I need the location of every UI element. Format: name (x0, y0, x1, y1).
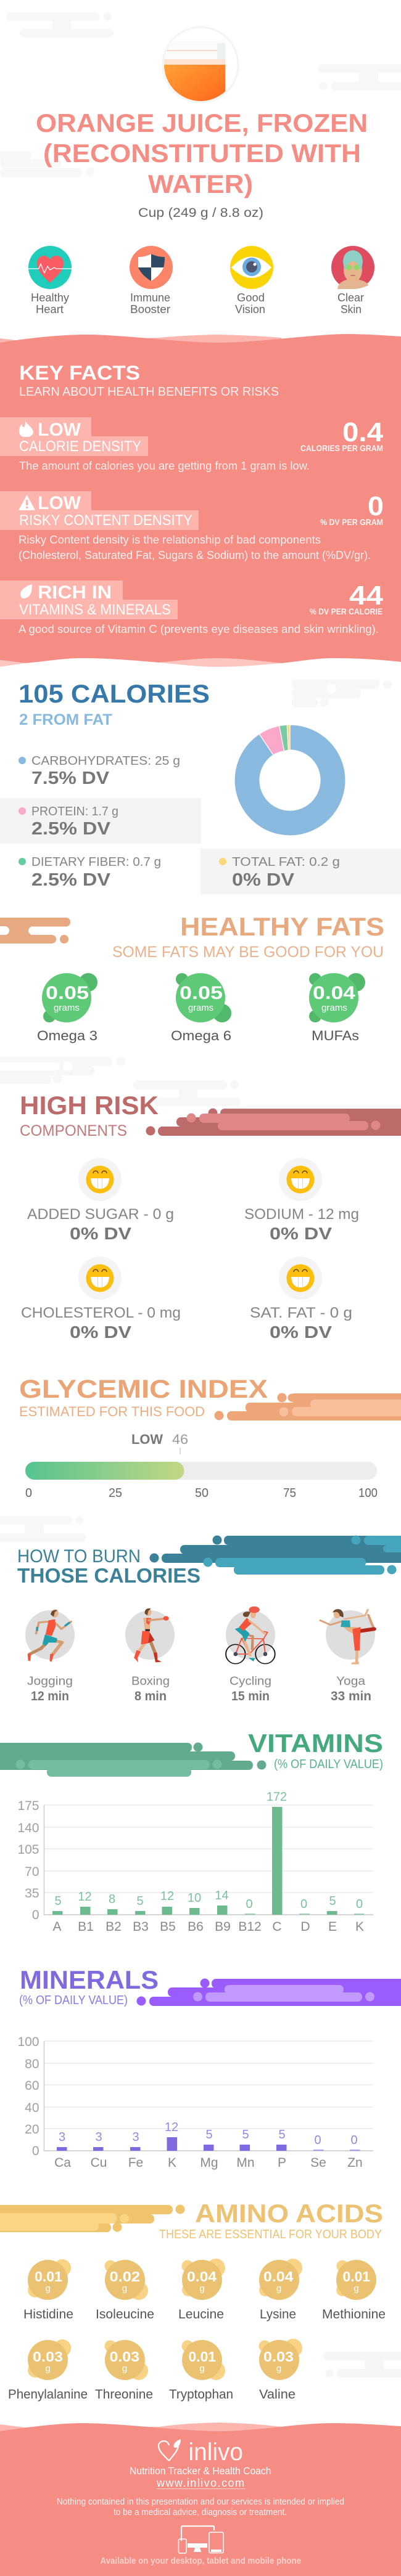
glycemic index gauge: 0 (25, 1486, 32, 1500)
background cloud: top left (6, 12, 114, 38)
glycemic index gauge (25, 1432, 378, 1500)
decorative band: vitamins (0, 1743, 267, 1777)
icon: warning triangle (19, 495, 35, 510)
legend: total fat: 0% DV (232, 870, 295, 890)
bar chart: vitamins: D (300, 1920, 310, 1934)
title (36, 108, 368, 198)
amino: isoleucine: Isoleucine (96, 2307, 154, 2321)
bar chart: minerals: 5 (242, 2128, 249, 2142)
fat: omega 3: Omega 3 (37, 1028, 97, 1043)
bar chart: minerals: 20 (25, 2122, 39, 2137)
bar chart: vitamins: 8 (109, 1893, 115, 1906)
fact: calorie density: 0.4 (342, 417, 384, 447)
fat: MUFAs: 0.04 (313, 983, 355, 1003)
amino: phenylalanine: g (45, 2363, 51, 2374)
fact: risky content density: Risky Content density is the relationship of bad components (19, 534, 321, 546)
background cloud: behind title (0, 151, 94, 177)
fat: omega 6: 0.05 (180, 983, 223, 1003)
glycemic index gauge: 25 (109, 1486, 122, 1500)
burn calories heading (17, 1546, 200, 1587)
risk: cholesterol: 0% DV (70, 1323, 131, 1342)
disclaimer (57, 2497, 344, 2517)
risk: sodium: SODIUM - 12 mg (244, 1206, 359, 1223)
fact: calorie density (0, 417, 384, 472)
amino acids heading (159, 2199, 383, 2241)
minerals heading: (% OF DAILY VALUE) (19, 1994, 128, 2007)
bar chart: vitamins: 0 (300, 1897, 307, 1911)
bar chart: vitamins: 5 (54, 1894, 62, 1908)
legend: carbohydrates: CARBOHYDRATES: 25 g (31, 754, 180, 768)
logo: inlivo (159, 2439, 243, 2466)
amino: threonine: 0.03 (110, 2349, 139, 2365)
fat: MUFAs: grams (321, 1003, 347, 1013)
fact: rich in vitamins and minerals: 44 (349, 581, 384, 611)
title: ORANGE JUICE, FROZEN (36, 108, 368, 137)
decorative band: healthy fats (0, 918, 70, 944)
background cloud: calories (292, 680, 392, 707)
glycemic index gauge: 46 (172, 1432, 188, 1447)
key facts heading: KEY FACTS (19, 362, 140, 384)
amino: isoleucine: g (122, 2283, 127, 2294)
glycemic index heading (19, 1374, 268, 1419)
calories heading (19, 679, 210, 728)
risk: cholesterol (21, 1257, 181, 1342)
bar chart: vitamins: B2 (105, 1920, 122, 1934)
bar chart: minerals: Mg (200, 2156, 218, 2170)
icon: desktop, tablet and phone (179, 2526, 223, 2553)
bar chart: vitamins: 105 (17, 1843, 39, 1857)
risk: sodium: 0% DV (270, 1224, 332, 1243)
benefit: clear skin: Clear (337, 291, 364, 304)
panel: key facts (0, 334, 401, 667)
bar chart: minerals: Zn (347, 2156, 363, 2170)
amino: tryptophan: 0.01 (189, 2349, 216, 2365)
bar chart: minerals: 0 (314, 2134, 321, 2147)
bar chart: vitamins: 0 (356, 1897, 363, 1911)
healthy fats heading: SOME FATS MAY BE GOOD FOR YOU (112, 944, 384, 961)
icon: flame (19, 420, 33, 437)
fat: omega 6 (171, 973, 231, 1043)
benefit: clear skin: Skin (341, 303, 362, 316)
bar chart: vitamins: 12 (160, 1889, 174, 1903)
amino: lysine: g (276, 2283, 281, 2294)
fact: risky content density (0, 491, 384, 561)
serving size: Cup (249 g / 8.8 oz) (138, 206, 263, 220)
amino: methionine: Methionine (322, 2307, 386, 2321)
benefit: clear skin (331, 246, 374, 316)
benefit: immune booster (130, 246, 173, 316)
fat: omega 3: 0.05 (46, 983, 89, 1003)
availability note: Available on your desktop, tablet and mobile phone (100, 2556, 301, 2566)
bar chart: minerals: K (168, 2156, 176, 2170)
background cloud: burn calories (0, 1516, 86, 1542)
amino: valine: Valine (259, 2387, 296, 2402)
legend: protein: 2.5% DV (31, 819, 111, 839)
amino: threonine: Threonine (95, 2387, 153, 2402)
benefit: healthy heart (28, 246, 72, 316)
benefit: immune booster: Immune (130, 291, 170, 304)
decorative band: minerals (137, 1978, 401, 2006)
legend: dietary fiber: 2.5% DV (31, 870, 111, 890)
bar chart: vitamins: 172 (267, 1790, 287, 1804)
bar chart: minerals: Cu (91, 2156, 107, 2170)
amino: valine: 0.03 (263, 2349, 294, 2365)
amino: histidine: g (45, 2283, 51, 2294)
amino: leucine: g (199, 2283, 205, 2294)
calories heading: 2 FROM FAT (19, 711, 112, 728)
risk: saturated fat: 0% DV (270, 1323, 332, 1342)
amino: leucine (178, 2259, 225, 2321)
risk: added sugar (27, 1158, 174, 1243)
key facts heading: LEARN ABOUT HEALTH BENEFITS OR RISKS (19, 385, 279, 399)
benefit: good vision: Good (237, 291, 265, 304)
amino: methionine (322, 2260, 386, 2321)
risk: cholesterol: CHOLESTEROL - 0 mg (21, 1305, 181, 1321)
activity: cycling (226, 1607, 275, 1703)
bar chart: vitamins: 35 (25, 1886, 39, 1901)
title: (RECONSTITUTED WITH (43, 139, 361, 168)
amino: valine: g (276, 2363, 281, 2374)
amino: isoleucine: 0.02 (110, 2268, 140, 2285)
benefit: immune booster: Booster (130, 303, 170, 316)
fact: calorie density: CALORIE DENSITY (19, 438, 141, 455)
title: WATER) (148, 169, 253, 198)
glycemic index gauge: 50 (195, 1486, 209, 1500)
activity: yoga: Yoga (336, 1675, 365, 1688)
amino: leucine: 0.04 (187, 2268, 217, 2285)
bar chart: minerals: 60 (25, 2079, 39, 2093)
amino: histidine: 0.01 (35, 2268, 62, 2285)
decorative band: amino acids (0, 2205, 185, 2232)
legend: total fat: TOTAL FAT: 0.2 g (232, 855, 340, 869)
risk: saturated fat: SAT. FAT - 0 g (250, 1305, 352, 1321)
activity: yoga: 33 min (331, 1689, 371, 1703)
key facts heading (19, 362, 279, 399)
fat: omega 6: grams (188, 1003, 213, 1013)
benefit: good vision: Vision (235, 303, 265, 316)
risk: sodium (244, 1158, 359, 1243)
amino acids heading: THESE ARE ESSENTIAL FOR YOUR BODY (159, 2228, 382, 2241)
decorative band: high risk (146, 1108, 401, 1136)
bar chart: vitamins: 175 (17, 1799, 39, 1813)
donut chart: macronutrients (234, 725, 345, 836)
glycemic index heading: ESTIMATED FOR THIS FOOD (19, 1404, 205, 1419)
healthy fats heading (112, 912, 384, 961)
activity: boxing: Boxing (131, 1675, 170, 1688)
disclaimer: Nothing contained in this presentation and our services is intended or implied (57, 2497, 344, 2507)
benefit: healthy heart: Healthy (31, 291, 69, 304)
amino: threonine (95, 2340, 153, 2402)
vitamins heading (248, 1729, 383, 1771)
tagline: Nutrition Tracker & Health Coach (130, 2465, 271, 2477)
fact: rich in vitamins and minerals: RICH IN (38, 582, 112, 603)
high risk heading (20, 1091, 159, 1139)
glycemic index gauge: 75 (283, 1486, 296, 1500)
decorative band: glycemic index (215, 1393, 401, 1420)
bar chart: vitamins (17, 1790, 373, 1934)
vitamins heading: (% OF DAILY VALUE) (274, 1758, 383, 1771)
fat: omega 3: grams (54, 1003, 80, 1013)
bar chart: vitamins: K (355, 1920, 364, 1934)
activity: yoga (320, 1609, 375, 1703)
bar chart: vitamins: 5 (136, 1894, 144, 1908)
bar chart: vitamins: C (272, 1920, 282, 1934)
bar chart: minerals: 3 (59, 2130, 65, 2144)
fact: risky content density: LOW (38, 493, 81, 513)
bar chart: vitamins: 14 (215, 1889, 229, 1902)
fact: risky content density: (Cholesterol, Saturated Fat, Sugars & Sodium) to the amount (%DV/gr). (19, 549, 371, 561)
bar chart: vitamins: B1 (78, 1920, 94, 1934)
high risk heading: HIGH RISK (20, 1091, 159, 1120)
glycemic index gauge: 100 (358, 1486, 378, 1500)
activity: cycling: Cycling (229, 1675, 271, 1688)
amino: valine (259, 2339, 302, 2402)
bar chart: vitamins: 0 (246, 1897, 253, 1911)
bar chart: vitamins: A (52, 1920, 62, 1934)
bar chart: vitamins: 10 (188, 1891, 201, 1905)
glycemic index gauge: LOW (131, 1432, 163, 1447)
legend: carbohydrates (19, 754, 180, 788)
bar chart: minerals: 100 (17, 2035, 39, 2049)
fact: calorie density: The amount of calories you are getting from 1 gram is low. (19, 460, 310, 472)
bar chart: minerals: 5 (205, 2128, 213, 2142)
bar chart: minerals: 5 (278, 2128, 286, 2142)
benefit: healthy heart: Heart (36, 303, 64, 316)
decorative band: burn calories (149, 1536, 401, 1575)
background cloud: left of high risk (0, 1057, 125, 1084)
fact: risky content density: % DV PER GRAM (320, 517, 383, 527)
background cloud: centre of high risk (133, 1080, 241, 1106)
healthy fats heading: HEALTHY FATS (180, 912, 384, 941)
burn calories heading: HOW TO BURN (17, 1546, 141, 1567)
amino: leucine: Leucine (178, 2307, 224, 2321)
amino: methionine: g (353, 2283, 359, 2294)
amino: lysine: Lysine (260, 2307, 296, 2321)
bar chart: vitamins: B5 (160, 1920, 176, 1934)
activity: boxing: 8 min (134, 1689, 167, 1703)
bar chart: vitamins: E (328, 1920, 337, 1934)
activity: cycling: 15 min (231, 1689, 270, 1703)
bar chart: minerals: Ca (54, 2156, 71, 2170)
icon: leaf (20, 584, 32, 598)
bar chart: vitamins: 12 (78, 1890, 92, 1904)
high risk heading: COMPONENTS (20, 1122, 127, 1139)
bar chart: minerals: 3 (95, 2130, 102, 2144)
minerals heading (19, 1965, 159, 2007)
bar chart: minerals: 12 (165, 2121, 178, 2134)
amino: tryptophan: Tryptophan (169, 2387, 233, 2402)
fact: rich in vitamins and minerals: % DV PER CALORIE (310, 606, 382, 616)
bar chart: vitamins: 140 (17, 1821, 39, 1835)
fact: calorie density: LOW (38, 420, 81, 440)
amino: phenylalanine (8, 2339, 88, 2402)
bar chart: minerals: 0 (350, 2134, 358, 2147)
website link: www.inlivo.com (156, 2477, 244, 2489)
amino: phenylalanine: Phenylalanine (8, 2387, 88, 2402)
activity: jogging: 12 min (31, 1689, 69, 1703)
fact: risky content density: 0 (368, 491, 384, 521)
glycemic index heading: GLYCEMIC INDEX (19, 1374, 268, 1403)
fat: MUFAs (309, 973, 365, 1043)
burn calories heading: THOSE CALORIES (17, 1564, 200, 1587)
fat: omega 6: Omega 6 (171, 1028, 231, 1043)
fat: MUFAs: MUFAs (312, 1028, 359, 1043)
legend: carbohydrates: 7.5% DV (31, 768, 110, 788)
logo: inlivo: inlivo (189, 2439, 243, 2466)
benefit: good vision (230, 246, 273, 316)
fat: omega 3 (37, 973, 97, 1043)
bar chart: vitamins: B6 (188, 1920, 204, 1934)
risk: saturated fat (250, 1257, 352, 1342)
fact: calorie density: CALORIES PER GRAM (300, 443, 383, 453)
background cloud: bottom right (323, 2352, 401, 2378)
bar chart: minerals: 0 (32, 2144, 39, 2158)
amino acids heading: AMINO ACIDS (195, 2199, 383, 2228)
amino: threonine: g (122, 2363, 127, 2374)
amino: histidine (23, 2259, 73, 2321)
amino: phenylalanine: 0.03 (33, 2349, 63, 2365)
bar chart: minerals: Mn (236, 2156, 255, 2170)
disclaimer: to be a medical advice, diagnosis or treatment. (114, 2507, 287, 2517)
background cloud: top right (318, 64, 401, 91)
risk: added sugar: 0% DV (70, 1224, 131, 1243)
amino: tryptophan: g (199, 2363, 205, 2374)
legend: total fat (200, 849, 401, 894)
bar chart: vitamins: 5 (329, 1894, 336, 1908)
bar chart: minerals: 80 (25, 2057, 39, 2071)
legend: protein (0, 798, 201, 844)
bar chart: vitamins: B9 (215, 1920, 231, 1934)
bar chart: minerals: Fe (128, 2156, 143, 2170)
calories heading: 105 CALORIES (19, 679, 210, 708)
bar chart: minerals: P (278, 2156, 286, 2170)
activity: jogging (25, 1609, 75, 1703)
vitamins heading: VITAMINS (248, 1729, 383, 1758)
amino: histidine: Histidine (23, 2307, 73, 2321)
amino: lysine (259, 2259, 302, 2321)
amino: lysine: 0.04 (263, 2268, 294, 2285)
fact: risky content density: RISKY CONTENT DENSITY (19, 512, 192, 529)
activity: jogging: Jogging (27, 1675, 73, 1688)
minerals heading: MINERALS (20, 1965, 159, 1994)
legend: dietary fiber (19, 855, 161, 890)
footer panel (0, 2423, 401, 2576)
legend: protein: PROTEIN: 1.7 g (31, 805, 118, 818)
bar chart: vitamins: B12 (238, 1920, 262, 1934)
amino: tryptophan (169, 2340, 233, 2402)
fact: rich in vitamins and minerals (0, 581, 384, 635)
fact: rich in vitamins and minerals: A good source of Vitamin C (prevents eye diseases and skin wrinkling). (19, 623, 379, 635)
amino: isoleucine (96, 2260, 154, 2321)
bar chart: vitamins: B3 (133, 1920, 149, 1934)
activity: boxing (125, 1608, 175, 1703)
legend: dietary fiber: DIETARY FIBER: 0.7 g (31, 855, 161, 869)
fact: rich in vitamins and minerals: VITAMINS & MINERALS (19, 601, 171, 618)
bar chart: minerals: 3 (132, 2130, 139, 2144)
bar chart: minerals (17, 2035, 373, 2170)
risk: added sugar: ADDED SUGAR - 0 g (27, 1206, 174, 1223)
bar chart: minerals: Se (310, 2156, 326, 2170)
food photo: glass of orange juice (163, 27, 238, 103)
bar chart: vitamins: 70 (25, 1865, 39, 1879)
amino: methionine: 0.01 (343, 2268, 370, 2285)
bar chart: vitamins: 0 (32, 1908, 39, 1922)
bar chart: minerals: 40 (25, 2101, 39, 2115)
